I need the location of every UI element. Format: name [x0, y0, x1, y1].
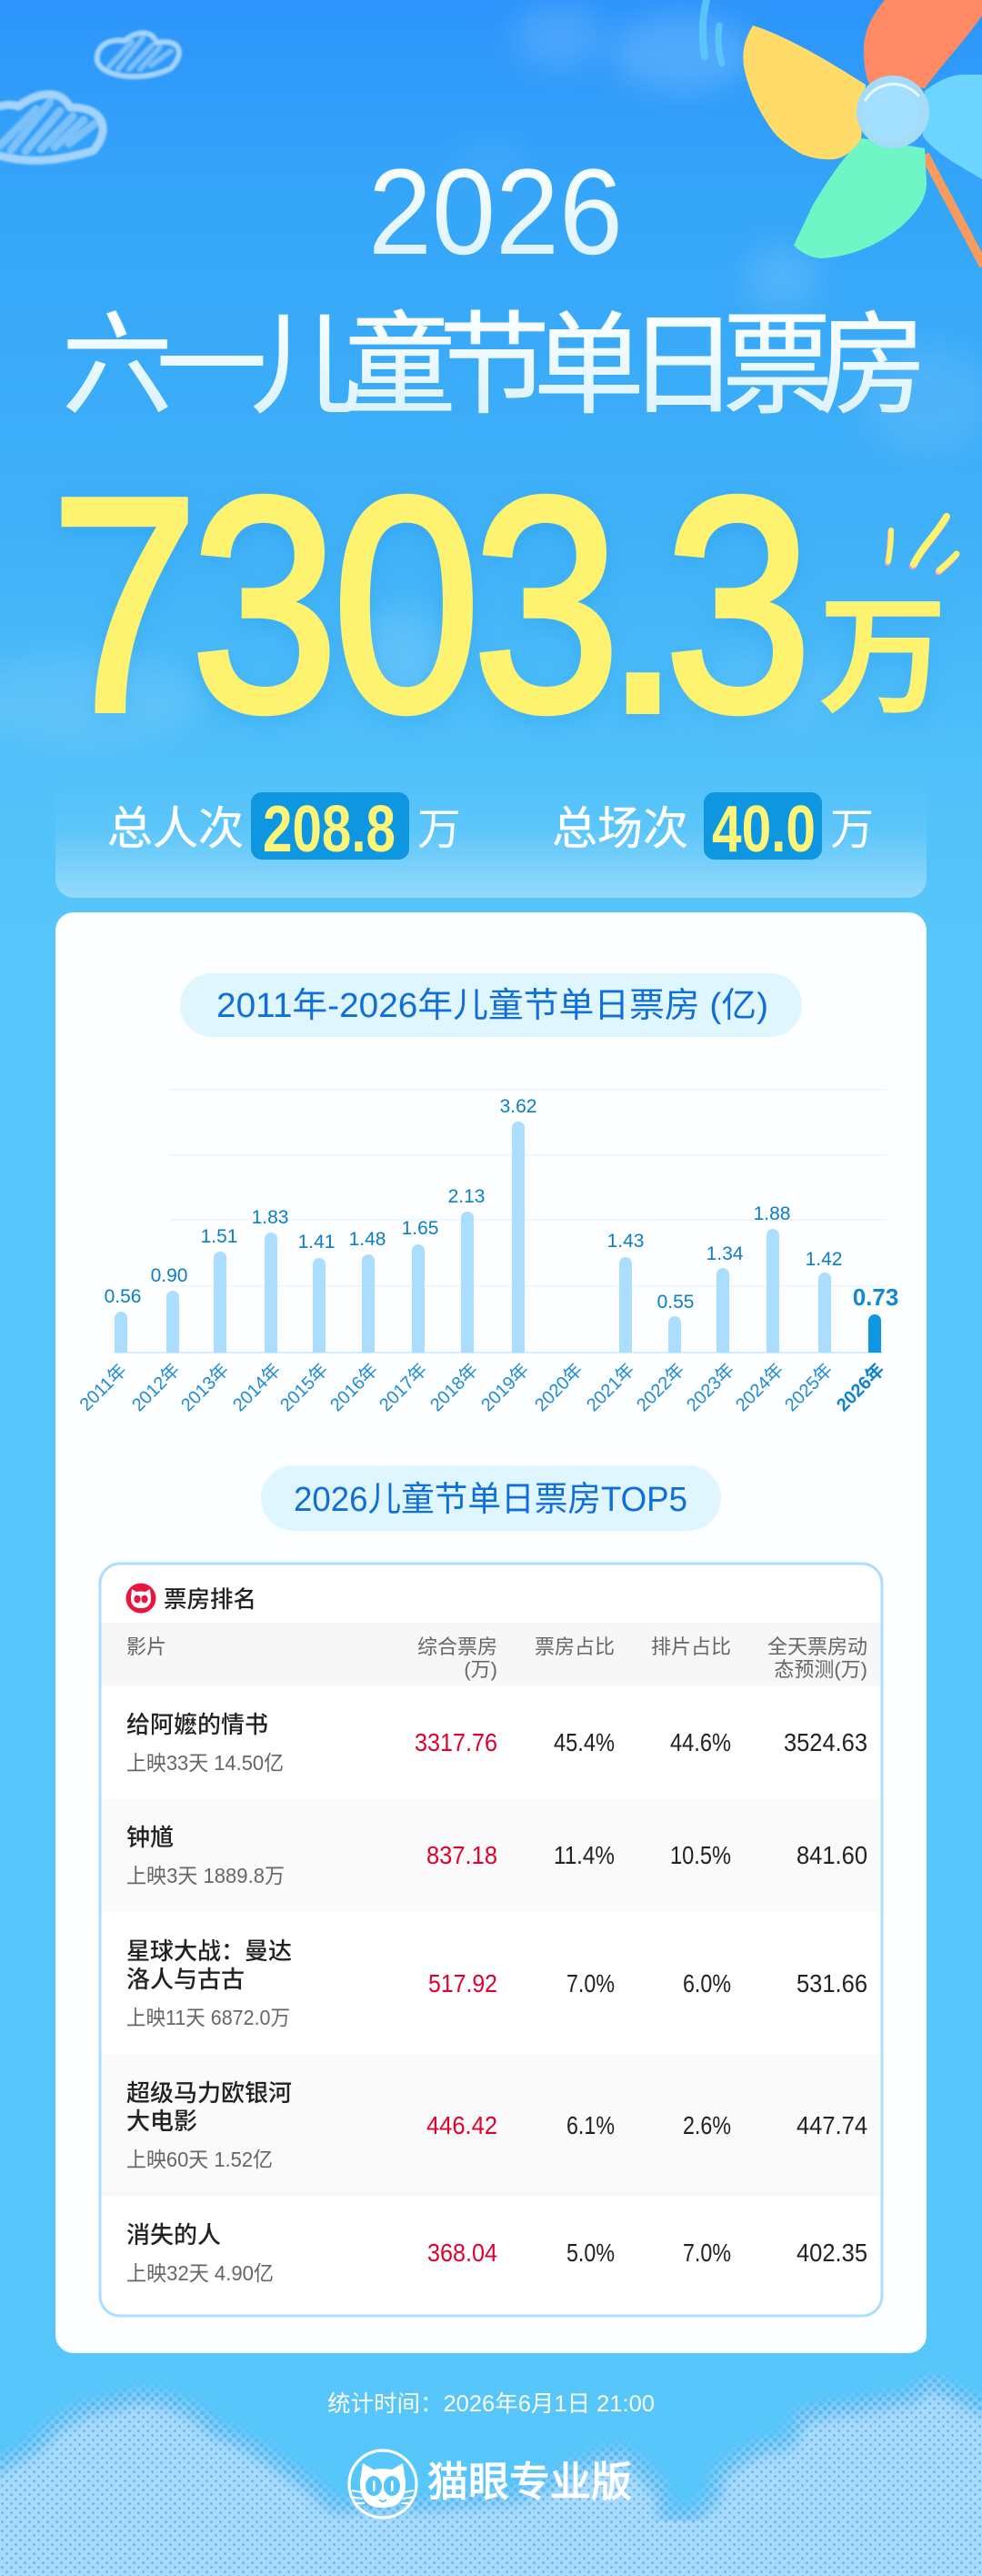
row 3: 517.92	[428, 1969, 497, 1997]
bar values	[105, 1096, 842, 1313]
big number 7303.3万	[51, 436, 947, 774]
red blade	[864, 0, 982, 88]
row 5: 消失的人	[126, 2221, 221, 2249]
row 3: 星球大战：曼达	[126, 1937, 292, 1965]
big number 7303.3万: .	[606, 436, 679, 774]
heading: bar chart title: 2011年-2026年儿童节单日票房 (亿)	[216, 987, 768, 1025]
bar chart: 0.73	[853, 1283, 898, 1311]
table column headers: 全天票房动	[767, 1635, 867, 1658]
heading: top 5 title	[261, 1465, 721, 1531]
bar values: 1.65	[402, 1218, 438, 1239]
big number 7303.3万: 3	[665, 436, 812, 774]
stat: screenings value: 40.0	[712, 793, 816, 866]
x axis labels: 2021年	[582, 1359, 638, 1415]
bar values: 1.51	[201, 1226, 237, 1247]
big number 7303.3万: 3	[191, 436, 338, 774]
title year: 2026	[368, 145, 623, 280]
bar values: 1.42	[806, 1249, 842, 1270]
bar values: 2.13	[448, 1186, 485, 1207]
bars	[115, 1122, 831, 1353]
row 1: 45.4%	[554, 1728, 615, 1756]
table column headers: 综合票房	[417, 1635, 497, 1658]
icon: chalk cloud large	[0, 95, 103, 160]
bar values: 1.43	[607, 1231, 644, 1252]
stat: total screenings label: 总场次	[552, 803, 688, 854]
row 2: 10.5%	[670, 1841, 731, 1869]
brand wordmark: 猫眼专业版	[427, 2459, 632, 2505]
table heading: 票房排名	[164, 1587, 256, 1613]
stat: admissions unit: 万	[417, 806, 461, 854]
panel: main white card	[55, 912, 927, 2353]
x axis labels: 2019年	[476, 1359, 533, 1415]
stat: screenings unit: 万	[830, 806, 874, 854]
table column headers: 态预测(万)	[774, 1658, 867, 1681]
row 1: 3317.76	[415, 1728, 497, 1756]
title: 六一儿童节单日票房	[62, 304, 927, 428]
pinwheel stick	[925, 155, 982, 266]
stat: admissions value: 208.8	[263, 793, 396, 866]
row 2: 11.4%	[554, 1841, 615, 1869]
row 3: 6.0%	[683, 1969, 731, 1997]
panel: ranking table	[100, 1564, 882, 2316]
table column headers: 票房占比	[535, 1635, 615, 1658]
bar values: 1.34	[706, 1243, 744, 1264]
yellow blade	[743, 25, 866, 159]
row 5: 上映32天 4.90亿	[126, 2261, 274, 2285]
halftone clouds at bottom	[0, 2372, 982, 2576]
row 1: 给阿嬷的情书	[126, 1711, 268, 1738]
row 3: 7.0%	[566, 1969, 615, 1997]
row 2	[126, 1824, 867, 1887]
cyan blade	[923, 75, 982, 179]
x axis labels: 2018年	[426, 1359, 482, 1415]
table column headers: 排片占比	[651, 1635, 731, 1658]
row 5	[126, 2221, 867, 2285]
heading: bar chart title	[180, 973, 802, 1037]
x axis labels: 2025年	[780, 1359, 837, 1415]
row 2: 上映3天 1889.8万	[126, 1864, 285, 1887]
row 2: 841.60	[797, 1841, 867, 1869]
row 2: 837.18	[426, 1841, 497, 1869]
motion lines	[703, 0, 722, 64]
hub	[857, 75, 929, 148]
table column headers	[126, 1635, 867, 1681]
bar chart	[75, 1090, 898, 1415]
row 5: 5.0%	[566, 2239, 615, 2267]
icon: maoyan logo	[349, 2450, 416, 2518]
bar values: 1.88	[754, 1203, 790, 1224]
x axis labels: 2022年	[632, 1359, 688, 1415]
x axis labels: 2023年	[682, 1359, 738, 1415]
row 1	[126, 1711, 867, 1775]
x axis labels	[75, 1359, 888, 1415]
bar values: 0.90	[151, 1265, 187, 1286]
row 1: 44.6%	[670, 1728, 731, 1756]
x axis labels: 2017年	[375, 1359, 431, 1415]
panel: stats band	[55, 773, 927, 898]
x axis labels: 2014年	[228, 1359, 285, 1415]
icon: sparkle marks	[887, 517, 957, 572]
big number 7303.3万: 万	[818, 586, 947, 730]
x axis labels: 2026年	[832, 1359, 888, 1415]
row 5: 7.0%	[683, 2239, 731, 2267]
stat: total admissions label: 总人次	[107, 803, 244, 854]
big number 7303.3万: 0	[333, 436, 480, 774]
row 4	[126, 2079, 867, 2171]
bar values: 3.62	[500, 1096, 536, 1117]
icon: pinwheel	[703, 0, 982, 266]
x axis labels: 2024年	[731, 1359, 787, 1415]
table column headers: (万)	[464, 1658, 497, 1681]
x axis labels: 2015年	[276, 1359, 332, 1415]
row 4: 上映60天 1.52亿	[126, 2148, 273, 2171]
row 3: 洛人与古古	[126, 1966, 245, 1993]
row 5: 368.04	[427, 2239, 497, 2267]
bar values: 0.56	[105, 1286, 141, 1307]
x axis labels: 2012年	[127, 1359, 184, 1415]
row 1: 上映33天 14.50亿	[126, 1751, 284, 1775]
green blade	[794, 138, 927, 258]
row 4: 447.74	[797, 2111, 867, 2139]
row 4: 2.6%	[683, 2111, 731, 2139]
row 1: 3524.63	[784, 1728, 867, 1756]
footer timestamp: 统计时间：2026年6月1日 21:00	[327, 2391, 655, 2417]
bar values: 0.55	[657, 1292, 694, 1313]
row 3	[126, 1937, 867, 2029]
big number 7303.3万: 3	[473, 436, 620, 774]
x axis labels: 2016年	[326, 1359, 382, 1415]
row 4: 超级马力欧银河	[126, 2079, 292, 2107]
row 4: 446.42	[426, 2111, 497, 2139]
bar values: 1.83	[252, 1207, 288, 1228]
x axis labels: 2020年	[530, 1359, 586, 1415]
bar values: 1.48	[349, 1229, 386, 1250]
table column headers: 影片	[126, 1635, 166, 1658]
icon: chalk cloud small	[97, 33, 179, 76]
row 2: 钟馗	[126, 1824, 174, 1851]
x axis labels: 2013年	[176, 1359, 233, 1415]
bar values: 1.41	[298, 1232, 335, 1253]
row 5: 402.35	[797, 2239, 867, 2267]
big number 7303.3万: 7	[51, 436, 198, 774]
row 4: 大电影	[126, 2108, 197, 2135]
x axis labels: 2011年	[75, 1360, 131, 1415]
row 3: 531.66	[797, 1969, 867, 1997]
heading: top 5 title: 2026儿童节单日票房TOP5	[294, 1481, 687, 1519]
row 4: 6.1%	[566, 2111, 615, 2139]
icon: maoyan red logo	[125, 1583, 156, 1614]
row 3: 上映11天 6872.0万	[126, 2006, 290, 2029]
